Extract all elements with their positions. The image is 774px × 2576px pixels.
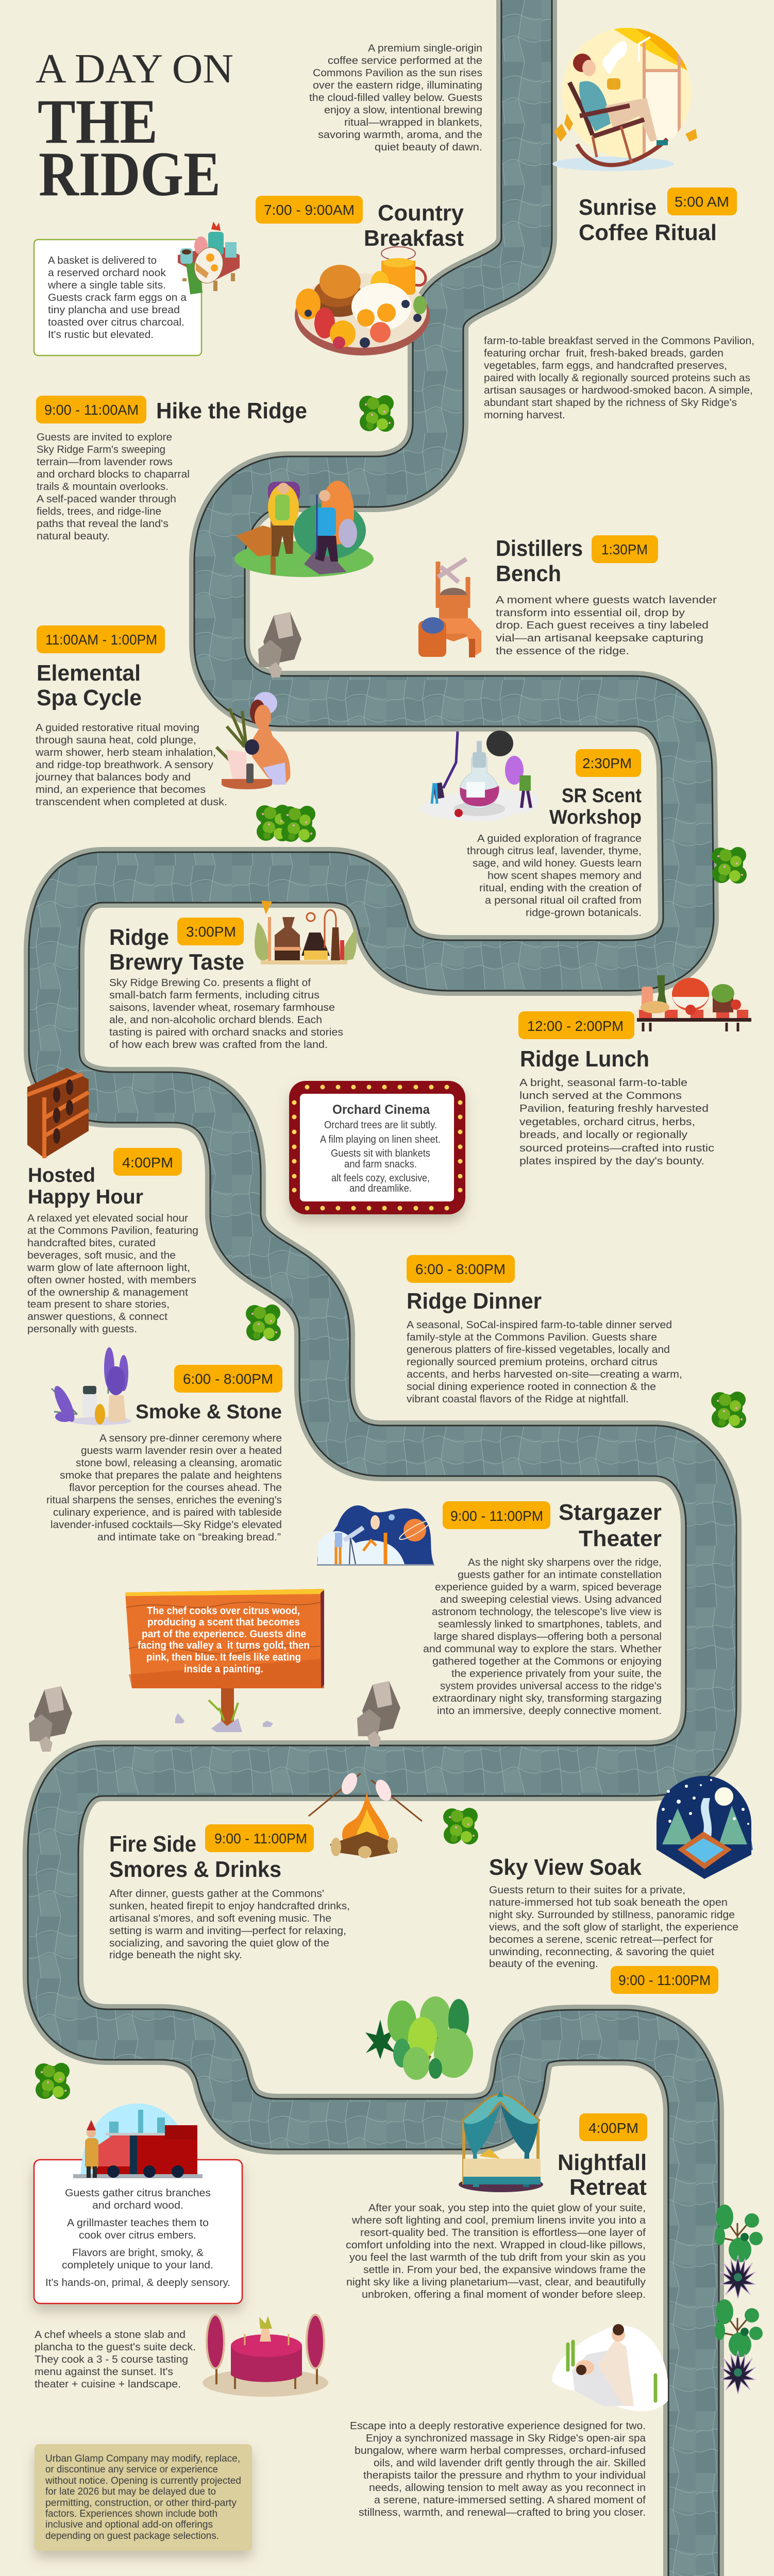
text: nightfall description: where soft lighting and cool, premium linens invite you into a [351,2215,646,2226]
text: sunrise coffee description: ritual—wrapped in blankets, [344,117,482,128]
text: stargazer description: experience guided by a warm, spiced beverage [435,1582,662,1593]
heading: Smoke & Stone: Smoke & Stone [136,1401,282,1423]
time badge 3:00PM: 3:00PM [186,924,236,940]
heading: Country Breakfast: Country [378,200,464,226]
text: smoke and stone description: and intimate take on “breaking bread.” [97,1532,281,1543]
text: happy hour description: A relaxed yet elevated social hour [27,1213,188,1224]
text: breakfast description: featuring orchar fruit, fresh-baked breads, garden [484,348,723,359]
icon: rock stack [258,612,301,677]
disclaimer panel: without notice. Opening is currently projected [45,2476,241,2486]
text: spa description: warm shower, herb steam inhalation, [35,747,216,758]
icon: bush [711,1392,746,1428]
heading: Stargazer Theater: Stargazer [559,1500,662,1525]
title: RIDGE [39,139,221,209]
time badge 2:30PM: 2:30PM [582,755,632,771]
icon: woman with coffee in rocking chair [552,21,697,171]
time badge 9:00 - 11:00PM [611,1966,718,1994]
heading: Hosted Happy Hour: Hosted [28,1164,95,1187]
text: hike description: terrain—from lavender rows [37,456,173,468]
callout: citrus grill panel: It's hands-on, primal, & deeply sensory. [45,2277,230,2289]
text: smoke and stone description: guests warm lavender resin over a heated [81,1445,282,1456]
disclaimer panel: or discontinue any service or experience [45,2464,218,2475]
text: dinner description: social dining experience rooted in connection & the [407,1381,656,1393]
text: scent workshop description: a personal ritual oil crafted from [485,895,642,906]
icon: tree cluster [365,1996,473,2080]
text: stargazer description: guests gather for an intimate constellation [458,1569,662,1581]
text: smoke and stone description: flavor perception for the courses ahead. The [69,1482,282,1494]
heading: Country Breakfast: Breakfast [364,226,464,251]
text: chef description: theater + cuisine + landscape. [35,2379,181,2390]
heading: SR Scent Workshop: Workshop [549,806,642,828]
text: nightfall description: After your soak, you step into the quiet glow of your suite, [368,2202,646,2214]
disclaimer panel: Urban Glamp Company may modify, replace, [45,2453,240,2464]
title [36,46,233,209]
text: couple massage description: oils, and wild lavender drift gently through the air. Skilled [374,2458,646,2469]
time badge 4:00PM [113,1148,182,1176]
heading: Distillers Bench: Bench [496,561,561,586]
text: brewry description: of how each brew was crafted from the land. [109,1039,328,1050]
disclaimer panel: inclusive and optional add-on offerings [45,2519,213,2530]
icon: campfire with marshmallows [309,1771,422,1858]
icon: wine rack [27,1068,89,1158]
text: hike description [37,432,190,542]
icon: canopy bed [459,2091,543,2192]
icon: bush [35,2063,70,2099]
title: A DAY ON [36,46,233,92]
heading: SR Scent Workshop: SR Scent [562,785,642,807]
text: dinner description: accents, and herbs harvested on-site—creating a warm, [407,1369,682,1380]
callout: citrus grill panel: completely unique to your land. [62,2260,213,2271]
text: sunrise coffee description: coffee service performed at the [328,55,482,66]
text: spa description: through sauna heat, cold plunge, [36,735,196,746]
wooden sign callout [125,1589,324,1732]
heading: Distillers Bench: Distillers [496,536,583,561]
text: sunrise coffee description: the cloud-filled valley below. Guests [309,92,482,104]
text: sky view soak description: night sky. Surrounded by stillness, panoramic ridge [489,1909,735,1921]
time badge 5:00 AM [667,188,737,215]
text: nightfall description: resort-quality bed. The transition is effortless—one layer of [360,2227,646,2239]
icon: bush [359,395,394,432]
text: brewry description: small-batch farm ferments, including citrus [109,990,319,1001]
icon: side plants [715,2205,763,2394]
text: smoke and stone description: A sensory pre-dinner ceremony where [99,1433,282,1444]
text: sunrise coffee description: Commons Pavilion as the sun rises [313,67,482,79]
text: sunrise coffee description: A premium single-origin [368,43,482,54]
icon: bush [712,847,747,884]
text: spa description: mind, an experience that becomes [36,784,206,795]
icon: bush [443,1808,478,1844]
time badge 4:00PM: 4:00PM [122,1155,173,1171]
icon: lunch table [631,975,752,1031]
text: scent workshop description: A guided exploration of fragrance [477,833,642,844]
text: fire side description [109,1888,350,1961]
time badge 4:00PM [579,2113,647,2141]
time badge 7:00 - 9:00AM: 7:00 - 9:00AM [264,202,355,218]
text: lunch description: breads, and locally or regionally [519,1129,687,1141]
text: chef description: A chef wheels a stone slab and [35,2329,186,2341]
text: hike description: Guests are invited to explore [37,432,172,443]
text: sky view soak description: nature-immersed hot tub soak beneath the open [489,1897,728,1908]
text: distillers description: drop. Each guest receives a tiny labeled [496,620,709,631]
text: scent workshop description: how scent shapes memory and [487,870,642,882]
heading: Ridge Dinner: Ridge Dinner [407,1289,542,1314]
heading: Elemental Spa Cycle: Spa Cycle [37,685,142,710]
disclaimer panel [35,2444,252,2551]
text: scent workshop description: sage, and wild honey. Guests learn [473,858,642,869]
heading: Nightfall Retreat: Retreat [569,2175,647,2200]
text: stargazer description: seamlessly linked to smartphones, tablets, and [438,1619,662,1630]
text: smoke and stone description: stone bowl, releasing a cleansing, aromatic [76,1458,282,1469]
wooden sign callout: The chef cooks over citrus wood, [147,1605,300,1617]
icon: perfume bottle with figures [418,731,539,821]
text: stargazer description: large shared displays—offering both a personal [434,1631,662,1642]
text: smoke and stone description: smoke that prepares the palate and heightens [60,1470,282,1481]
text: hike description: natural beauty. [37,531,110,542]
text: couple massage description: Enjoy a synchronized massage in Sky Ridge's open-air spa [366,2433,646,2444]
text: sky view soak description: unwinding, reconnecting, & savoring the quiet [489,1946,714,1958]
callout: Orchard Cinema marquee: A film playing on linen sheet. [320,1134,441,1145]
heading: Fire Side Smores & Drinks: Smores & Drinks [109,1857,281,1882]
heading: Sunrise Coffee Ritual [579,195,717,245]
text: scent workshop description: ritual, ending with the creation of [479,883,642,894]
disclaimer panel: for late 2026 but may be delayed due to [45,2486,216,2497]
text: nightfall description [346,2202,646,2300]
text: stargazer description: and communal way to explore the stars. Whether [423,1643,662,1655]
callout: Orchard Cinema marquee [289,1081,465,1214]
time badge 6:00 - 8:00PM: 6:00 - 8:00PM [415,1261,506,1277]
heading: Fire Side Smores & Drinks [109,1832,281,1882]
text: sunrise coffee description: over the eastern ridge, illuminating [313,80,482,91]
icon: brewery still [255,901,357,964]
wooden sign callout: part of the experience. Guests dine [142,1629,306,1640]
time badge 5:00 AM: 5:00 AM [675,194,729,210]
heading: SR Scent Workshop [549,785,642,828]
text: happy hour description: personally with guests. [27,1324,137,1335]
text: sky view soak description [489,1885,738,1970]
time badge 3:00PM [177,918,244,945]
text: lunch description: vegetables, orchard citrus, herbs, [519,1116,695,1128]
callout: basket note: toasted over citrus charcoal. [48,317,184,328]
disclaimer panel: depending on guest package selections. [45,2531,219,2541]
text: stargazer description: the experience privately from your suite, the [451,1668,662,1680]
time badge 2:30PM [576,749,641,777]
icon: bush pair [256,805,316,842]
text: smoke and stone description: ritual sharpens the senses, enriches the evening's [46,1495,282,1506]
heading: Fire Side Smores & Drinks: Fire Side [109,1832,196,1857]
text: chef description: plancha to the guest's suite deck. [35,2342,196,2353]
text: smoke and stone description: lavender-infused cocktails—Sky Ridge's elevated [51,1519,282,1531]
text: breakfast description: farm-to-table breakfast served in the Commons Pavilion, [484,335,754,347]
text: sky view soak description: Guests return to their suites for a private, [489,1885,685,1896]
time badge 9:00 - 11:00AM: 9:00 - 11:00AM [44,402,139,418]
time badge 1:30PM [592,535,658,563]
time badge 7:00 - 9:00AM [256,196,363,224]
text: couple massage description: needs, allowing tension to melt away as you reconnect in [369,2482,646,2494]
text: breakfast description: abundant start shaped by the richness of Sky Ridge's [484,397,737,409]
callout: Orchard Cinema marquee: Orchard Cinema [332,1103,430,1117]
text: lunch description: sourced proteins—crafted into rustic [519,1143,714,1154]
text: nightfall description: comfort unfolding into the next. Wrapped in cloud-like pillows, [346,2240,646,2251]
icon: breakfast plate with juice [295,247,430,355]
time badge 9:00 - 11:00PM: 9:00 - 11:00PM [450,1508,543,1524]
text: happy hour description: often owner hosted, with members [27,1275,196,1286]
text: breakfast description: morning harvest. [484,410,565,421]
text: dinner description: generous platters of fire-kissed vegetables, locally and [407,1344,670,1355]
heading: Stargazer Theater [559,1500,662,1551]
text: fire side description: ridge beneath the night sky. [109,1950,242,1961]
time badge 12:00 - 2:00PM [518,1011,634,1039]
text: hike description: and orchard blocks to chaparral [37,469,190,480]
text: breakfast description: vegetables, farm eggs, and handcrafted preserves, [484,360,727,371]
wooden sign callout: producing a scent that becomes [147,1617,300,1628]
icon: dining table for two [203,2315,328,2397]
text: couple massage description: therapists tailor the pressure and rhythm to your individual [363,2470,646,2481]
callout: basket note: where a single table sits. [47,280,166,291]
text: chef description: menu against the sunset. It's [35,2366,173,2378]
heading: Sky View Soak: Sky View Soak [489,1855,642,1880]
text: hike description: Sky Ridge Farm's sweeping [37,444,165,455]
text: hike description: A self-paced wander through [37,494,176,505]
text: fire side description: After dinner, guests gather at the Commons' [109,1888,324,1900]
text: distillers description: A moment where guests watch lavender [496,595,717,606]
text: couple massage description: bungalow, where warm herbal compresses, orchard-infused [355,2445,646,2456]
text: distillers description [496,595,717,657]
icon: stargazers with telescope [317,1505,434,1566]
heading: Elemental Spa Cycle [37,660,142,710]
text: stargazer description: into an immersive, deeply connective moment. [437,1705,662,1717]
heading: Sunrise Coffee Ritual: Coffee Ritual [579,220,717,245]
text: sky view soak description: views, and the soft glow of starlight, the experience [489,1922,738,1933]
text: sky view soak description: beauty of the evening. [489,1958,598,1970]
text: nightfall description: night sky like a living planetarium—vast, clear, and beautifully [346,2277,646,2288]
text: fire side description: setting is warm and inviting—perfect for relaxing, [109,1925,346,1937]
callout: citrus grill panel: A grillmaster teaches them to [67,2217,209,2229]
time badge 6:00 - 8:00PM [407,1255,515,1283]
text: fire side description: sunken, heated firepit to enjoy handcrafted drinks, [109,1901,350,1912]
heading: Country Breakfast [364,200,464,251]
text: couple massage description: Escape into a deeply restorative experience designed for two. [350,2420,646,2432]
text: happy hour description: handcrafted bites, curated [27,1238,156,1249]
time badge 12:00 - 2:00PM: 12:00 - 2:00PM [527,1018,624,1034]
heading: Nightfall Retreat: Nightfall [558,2150,647,2175]
text: hike description: paths that reveal the land's [37,518,169,530]
text: hike description: fields, trees, and ridge-line [37,506,161,517]
icon: right rocks [357,1681,400,1747]
text: distillers description: the essence of the ridge. [496,646,629,657]
heading: Nightfall Retreat [558,2150,647,2200]
text: stargazer description: astronom technology, the telescope's live view is [432,1606,662,1618]
wooden sign callout: facing the valley a it turns gold, then [138,1640,310,1651]
callout: Orchard Cinema marquee: Orchard trees are lit subtly. [324,1120,437,1131]
callout: citrus grill panel: cook over citrus embers. [79,2230,196,2241]
text: breakfast description: paired with locally & regionally sourced proteins such as [484,372,750,384]
text: brewry description [109,977,343,1050]
text: spa description: A guided restorative ritual moving [36,722,199,734]
time badge 9:00 - 11:00AM [36,396,146,423]
icon: left rocks [29,1686,72,1752]
text: lunch description [519,1077,714,1167]
text: spa description: and ridge-top breathwork. A sensory [36,759,213,771]
text: spa description [35,722,227,808]
text: spa description: journey that balances body and [35,772,191,783]
text: nightfall description: unbroken, offering a final moment of wonder before sleep. [362,2289,646,2300]
text: dinner description [407,1319,682,1405]
text: fire side description: artisanal s'mores, and soft evening music. The [109,1913,331,1924]
text: fire side description: socializing, and savoring the quiet glow of the [109,1938,329,1949]
heading: Sunrise Coffee Ritual: Sunrise [579,195,657,220]
text: happy hour description [27,1213,198,1335]
text: couple massage description [350,2420,646,2518]
time badge 11:00AM - 1:00PM: 11:00AM - 1:00PM [45,632,157,648]
icon: sky view hot tub [657,1776,754,1879]
text: scent workshop description: ridge-grown botanicals. [526,907,642,919]
callout: Orchard Cinema marquee: and farm snacks. [344,1159,417,1170]
text: lunch description: A bright, seasonal farm-to-table [519,1077,687,1089]
callout: basket note: a reserved orchard nook [48,267,166,279]
callout: Orchard Cinema marquee: Guests sit with blankets [331,1148,430,1159]
disclaimer panel: factors. Experiences shown include both [45,2509,217,2519]
text: lunch description: lunch served at the Commons [519,1090,682,1101]
text: breakfast description: artisan sausages or hardwood-smoked bacon. A simple, [484,385,753,396]
icon: bush [246,1304,281,1341]
text: lunch description: Pavilion, featuring freshly harvested [519,1103,709,1114]
text: stargazer description: system provides universal access to the ridge's [440,1681,662,1692]
callout: citrus grill panel: Guests gather citrus branches [65,2188,211,2199]
text: brewry description: Sky Ridge Brewing Co. presents a flight of [109,977,311,989]
icon: couples massage [552,2324,668,2411]
text: brewry description: tasting is paired with orchard snacks and stories [109,1027,343,1038]
text: dinner description: A seasonal, SoCal-inspired farm-to-table dinner served [407,1319,672,1331]
icon: hikers at trail sign [234,481,374,577]
text: sunrise coffee description: enjoy a slow, intentional brewing [324,105,482,116]
text: happy hour description: of the ownership & management [27,1287,188,1298]
disclaimer panel: permitting, construction, or other third-party [45,2498,237,2509]
icon: fire truck with firefighter [73,2104,203,2178]
callout: citrus grill panel: Flavors are bright, smoky, & [72,2247,204,2259]
text: happy hour description: warm glow of late afternoon light, [27,1262,190,1274]
text: scent workshop description [467,833,642,919]
icon: lavender still press [418,559,481,657]
time badge 6:00 - 8:00PM: 6:00 - 8:00PM [183,1371,273,1387]
text: happy hour description: team present to share stories, [27,1299,170,1310]
heading: Hike the Ridge: Hike the Ridge [156,398,307,423]
text: sunrise coffee description: quiet beauty of dawn. [375,142,482,153]
callout: Orchard Cinema marquee: alt feels cozy, exclusive, [331,1173,430,1184]
time badge 9:00 - 11:00PM: 9:00 - 11:00PM [618,1972,711,1988]
text: couple massage description: a serene, nature-immersed setting. A shared moment of [374,2495,646,2506]
time badge 9:00 - 11:00PM [205,1824,314,1852]
text: stargazer description: extraordinary night sky, transforming stargazing [432,1693,662,1704]
text: stargazer description: and sweeping celestial views. Using advanced [440,1594,662,1605]
text: distillers description: transform into essential oil, drop by [496,607,685,619]
text: couple massage description: stillness, warmth, and renewal—crafted to bring you closer. [359,2507,646,2518]
callout: Orchard Cinema marquee: and dreamlike. [349,1183,412,1194]
time badge 4:00PM: 4:00PM [588,2120,638,2136]
heading: Ridge Lunch: Ridge Lunch [520,1046,649,1072]
text: brewry description: ale, and non-alcoholic orchard blends. Each [109,1014,322,1026]
title: THE [38,86,158,157]
text: dinner description: vibrant coastal flavors of the Ridge at nightfall. [407,1394,629,1405]
text: stargazer description: gathered together at the Commons or enjoying [432,1656,662,1667]
text: chef description: They cook a 3 - 5 course tasting [35,2354,188,2365]
icon: spa woman with towel [216,692,290,789]
text: scent workshop description: through citrus leaf, lavender, thyme, [467,845,642,857]
text: nightfall description: you feel the last warmth of the tub drift from your skin as you [349,2252,646,2263]
callout: basket note: tiny plancha and use bread [48,304,180,316]
text: brewry description: saisons, lavender wheat, rosemary farmhouse [109,1002,335,1013]
text: happy hour description: answer questions, & connect [27,1311,167,1323]
text: nightfall description: settle in. From your bed, the expansive windows frame the [363,2264,646,2276]
callout: basket note [34,240,201,355]
text: lunch description: plates inspired by the day's bounty. [519,1156,704,1167]
text: stargazer description [423,1557,662,1717]
text: smoke and stone description [46,1433,282,1543]
text: dinner description: regionally sourced premium proteins, orchard citrus [407,1357,658,1368]
callout: basket note: It's rustic but elevated. [48,329,154,341]
heading: Hosted Happy Hour: Happy Hour [28,1186,143,1208]
text: spa description: transcendent when completed at dusk. [36,796,227,808]
time badge 11:00AM - 1:00PM [37,625,165,653]
time badge 9:00 - 11:00PM [443,1501,550,1529]
callout: citrus grill panel [34,2160,242,2303]
text: smoke and stone description: culinary experience, and is paired with tableside [53,1507,282,1518]
callout: citrus grill panel: and orchard wood. [92,2200,183,2211]
icon: lavender and oils [51,1347,131,1425]
heading: Ridge Brewry Taste [109,925,244,975]
text: chef description [35,2329,196,2390]
callout: basket note: A basket is delivered to [48,255,157,266]
text: breakfast description [484,335,754,421]
wooden sign callout: inside a painting. [184,1664,263,1675]
time badge 6:00 - 8:00PM [174,1365,282,1393]
wooden sign callout: pink, then blue. It feels like eating [146,1652,301,1663]
icon: picnic table [178,222,240,294]
text: stargazer description: As the night sky sharpens over the ridge, [468,1557,662,1568]
heading: Hosted Happy Hour [28,1164,143,1208]
text: sky view soak description: becomes a serene, scenic retreat—perfect for [489,1934,713,1945]
text: dinner description: family-style at the Commons Pavilion. Guests share [407,1332,657,1343]
text: happy hour description: at the Commons Pavilion, featuring [27,1225,198,1236]
heading: Ridge Brewry Taste: Ridge [109,925,169,950]
heading: Stargazer Theater: Theater [579,1526,662,1551]
heading: Elemental Spa Cycle: Elemental [37,660,141,686]
heading: Distillers Bench [496,536,583,586]
text: sunrise coffee description [309,43,482,153]
text: happy hour description: beverages, soft music, and the [27,1250,176,1261]
text: hike description: trails & mountain overlooks. [37,481,169,493]
text: distillers description: vial—an artisanal keepsake capturing [496,633,703,644]
text: sunrise coffee description: savoring warmth, aroma, and the [318,129,482,141]
time badge 1:30PM: 1:30PM [601,541,648,557]
callout: basket note: Guests crack farm eggs on a [48,292,187,303]
time badge 9:00 - 11:00PM: 9:00 - 11:00PM [214,1831,307,1846]
heading: Ridge Brewry Taste: Brewry Taste [109,950,244,975]
